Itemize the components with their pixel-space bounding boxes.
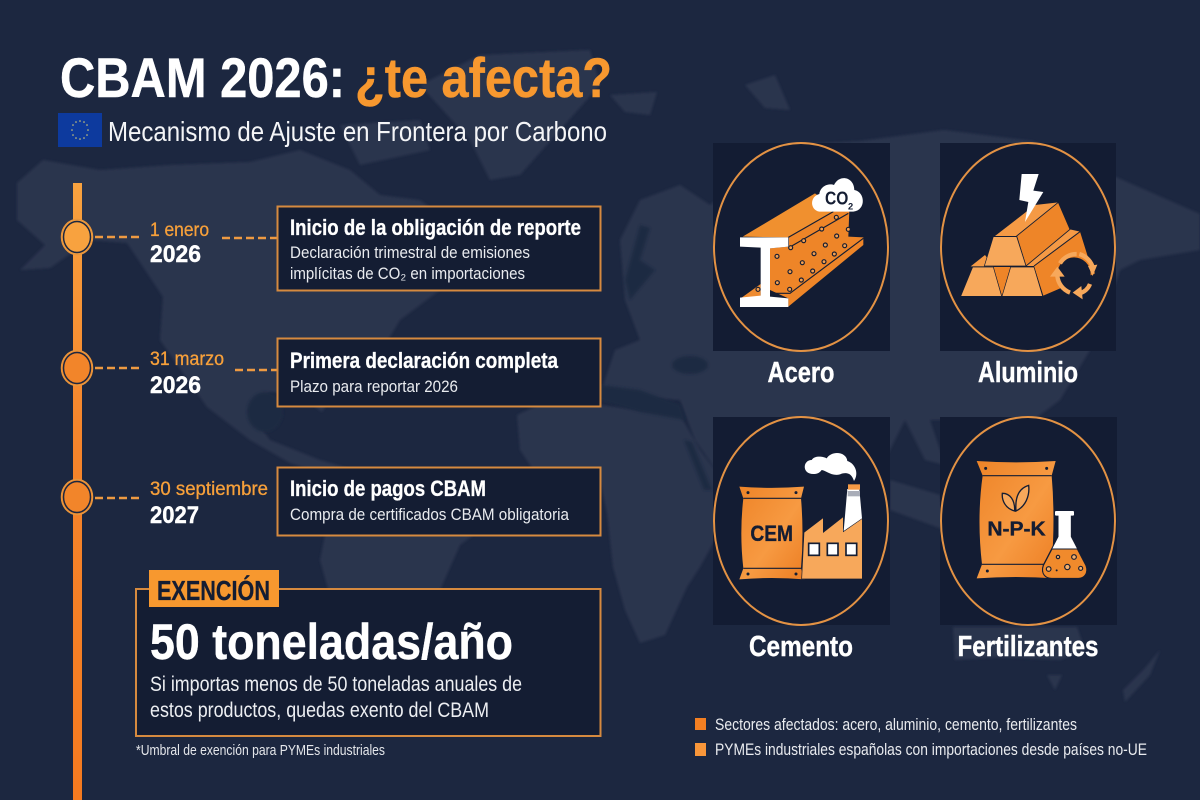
title: [60, 46, 612, 109]
card: inicio de reporte: Declaración trimestral de emisiones: [290, 244, 530, 262]
card: inicio de pagos: Inicio de pagos CBAM: [290, 476, 486, 501]
milestone 1: [62, 220, 277, 268]
icon: steel beam with CO2 cloud: CO: [825, 188, 848, 209]
timeline: [62, 183, 277, 800]
milestone 1: 2026: [150, 241, 201, 268]
exención tag: EXENCIÓN: [157, 575, 270, 606]
icon: aluminium ingots with bolt: [961, 174, 1097, 299]
label: fertilizantes: Fertilizantes: [958, 631, 1098, 663]
icon: steel beam with CO2 cloud: 2: [848, 201, 853, 211]
panel: exención: [136, 570, 600, 736]
title: CBAM 2026:: [60, 46, 345, 109]
milestone 2: 31 marzo: [150, 349, 224, 370]
icon: steel beam with CO2 cloud: [740, 178, 863, 307]
inland seas: [247, 225, 712, 490]
card: inicio de reporte: Inicio de la obligación de reporte: [290, 215, 581, 240]
card: primera declaración: [278, 338, 600, 406]
card: inicio de pagos: Compra de certificados CBAM obligatoria: [290, 506, 570, 524]
card: primera declaración: Plazo para reportar 2026: [290, 378, 458, 396]
panel: aluminio: [940, 143, 1116, 351]
subtitle: Mecanismo de Ajuste en Frontera por Carbono: [108, 116, 607, 147]
card: inicio de reporte: [278, 206, 600, 290]
milestone 3: 30 septiembre: [150, 479, 268, 500]
milestone 3: 2027: [150, 502, 199, 529]
panel: cemento: [713, 417, 890, 625]
milestone 3: [62, 479, 268, 529]
threshold figure: 50 toneladas/año: [150, 614, 513, 670]
icon: fertilizer bag and flask: [977, 461, 1087, 578]
exemption description: [150, 672, 522, 722]
icon: fertilizer bag and flask: N-P-K: [987, 518, 1046, 541]
label: cemento: Cemento: [749, 631, 853, 663]
milestone 2: [62, 349, 277, 399]
exemption description: Si importas menos de 50 toneladas anuales de: [150, 672, 522, 696]
footnote: *Umbral de exención para PYMEs industriales: [136, 743, 385, 759]
title: ¿te afecta?: [355, 46, 612, 109]
icon: cement bag and factory: CEM: [750, 521, 793, 546]
exención tag: [149, 570, 279, 607]
label: aluminio: Aluminio: [978, 357, 1078, 389]
exemption description: estos productos, quedas exento del CBAM: [150, 698, 489, 722]
label: acero: Acero: [768, 357, 834, 389]
icon: cement bag and factory: [739, 453, 862, 579]
panel: acero: [713, 143, 890, 351]
milestone 2: 2026: [150, 372, 201, 399]
legend: [695, 716, 1147, 759]
icon: EU flag: [58, 113, 102, 147]
card: inicio de reporte: implícitas de CO₂ en importaciones: [290, 265, 525, 283]
card: primera declaración: Primera declaración completa: [290, 348, 559, 373]
milestone 1: 1 enero: [150, 220, 209, 241]
card: inicio de pagos: [278, 468, 600, 536]
timeline vertical line: [73, 183, 82, 800]
legend: Sectores afectados: acero, aluminio, cemento, fertilizantes: [715, 716, 1077, 734]
panel: fertilizantes: [940, 417, 1117, 625]
